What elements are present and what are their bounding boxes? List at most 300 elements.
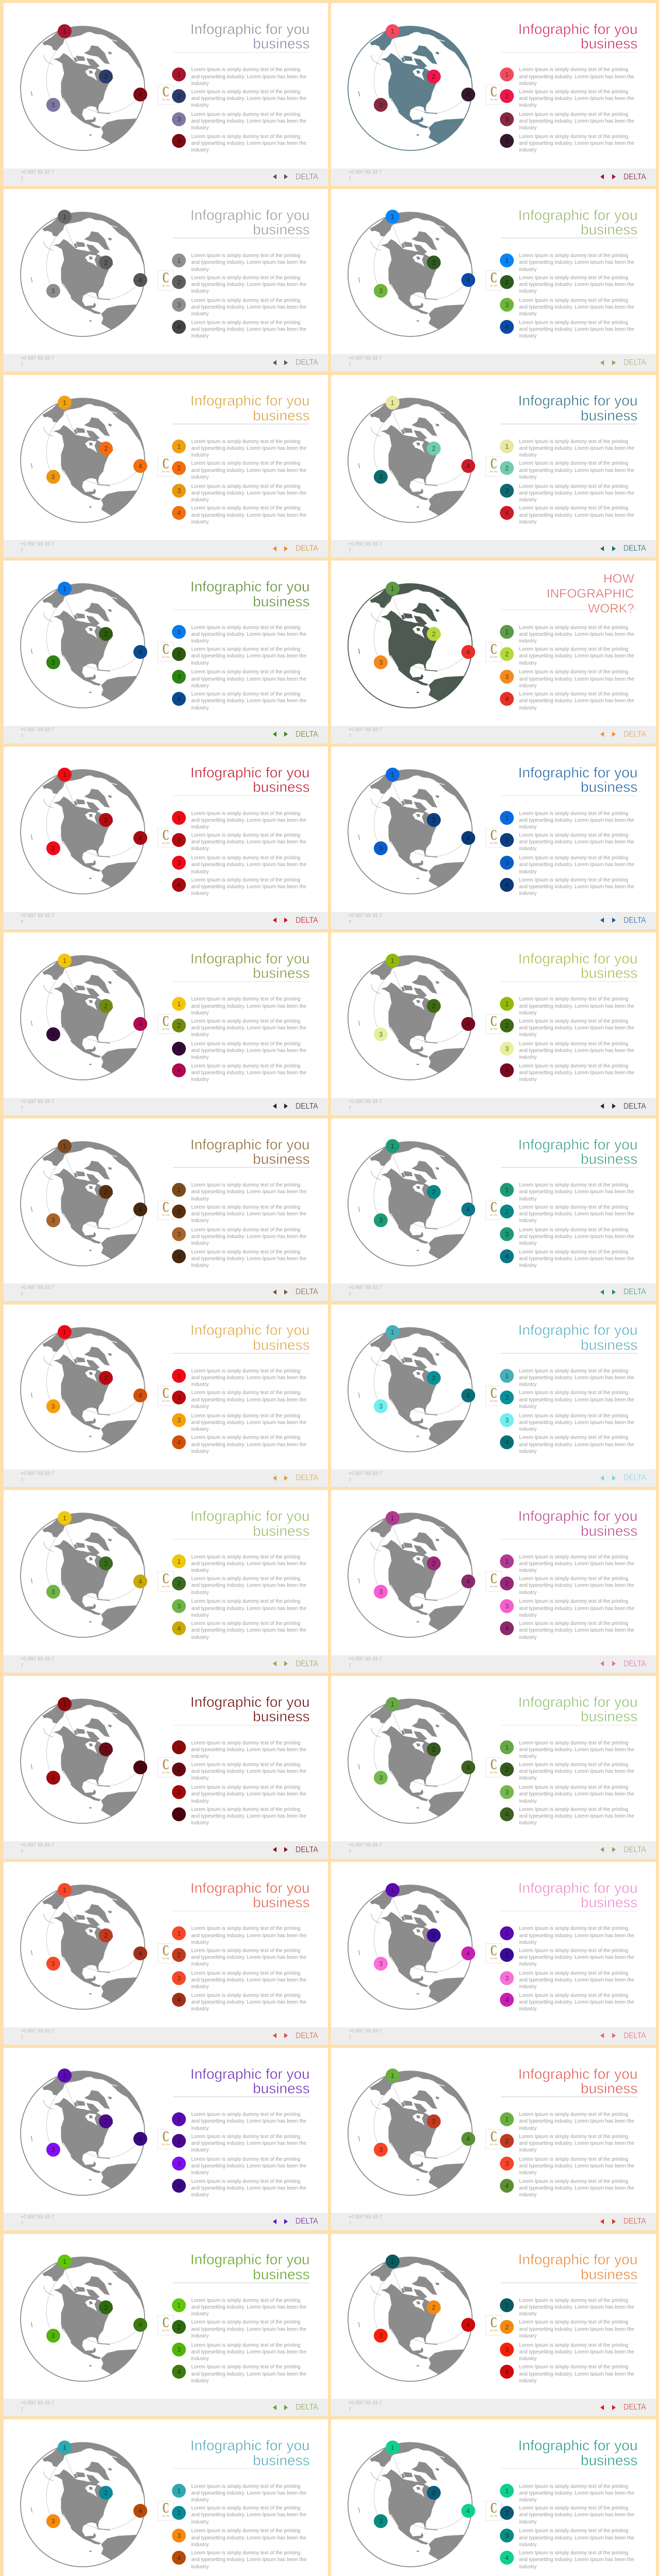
marker 3: 3 <box>379 1588 383 1596</box>
list item 3: Lorem Ipsum is simply dummy text of the printing and typesetting industry. Lorem Ipsum has been the industry <box>519 298 634 317</box>
marker 3 <box>374 2329 388 2343</box>
marker 2 <box>99 2486 113 2500</box>
marker 1 <box>58 1697 72 1711</box>
list item 2: Lorem Ipsum is simply dummy text of the printing and typesetting industry. Lorem Ipsum has been the industry <box>519 2505 634 2525</box>
list item 4: 4 <box>505 1066 509 1074</box>
title: Infographic for you <box>518 2066 637 2082</box>
marker 2: 2 <box>432 259 436 266</box>
title <box>518 393 637 423</box>
list item 4: Lorem Ipsum is simply dummy text of the printing and typesetting industry. Lorem Ipsum has been the industry <box>519 505 634 525</box>
list item 2: 2 <box>177 1951 181 1959</box>
list item 1: 1 <box>177 443 181 450</box>
list item 1: Lorem Ipsum is simply dummy text of the printing and typesetting industry. Lorem Ipsum has been the industry <box>191 1926 306 1945</box>
watermark <box>485 2129 502 2149</box>
marker 1 <box>58 582 72 596</box>
list item 4: Lorem Ipsum is simply dummy text of the printing and typesetting industry. Lorem Ipsum has been the industry <box>519 1993 634 2012</box>
list item 1: Lorem Ipsum is simply dummy text of the printing and typesetting industry. Lorem Ipsum has been the industry <box>191 2112 306 2131</box>
panel: slide 25 <box>3 2234 328 2416</box>
list item 2: 2 <box>505 464 509 472</box>
footer: 7 <box>21 548 23 554</box>
title <box>518 952 637 981</box>
title: Infographic for you <box>518 2251 637 2267</box>
marker 4: 4 <box>138 276 142 284</box>
footer <box>3 2213 328 2230</box>
footer: 7 <box>21 1106 23 1111</box>
footer: 7 <box>349 1106 351 1111</box>
footer: 7 <box>349 2221 351 2227</box>
marker 1 <box>58 396 72 410</box>
marker 3: 3 <box>379 1774 383 1782</box>
list item 1: 1 <box>505 1000 509 1008</box>
list item 3: 3 <box>177 2346 181 2353</box>
list item 1: Lorem Ipsum is simply dummy text of the printing and typesetting industry. Lorem Ipsum has been the industry <box>191 2298 306 2317</box>
title <box>190 1509 310 1538</box>
title: business <box>581 36 637 52</box>
footer <box>331 2027 656 2044</box>
list item 1: 1 <box>505 257 509 264</box>
footer <box>3 1841 328 1859</box>
list item 2: Lorem Ipsum is simply dummy text of the printing and typesetting industry. Lorem Ipsum has been the industry <box>519 2319 634 2339</box>
watermark: KK TM <box>162 1771 169 1774</box>
title <box>190 2252 310 2282</box>
list item 3: 3 <box>505 1416 509 1424</box>
marker 1 <box>386 2255 400 2268</box>
title <box>190 2438 310 2468</box>
list item 4: Lorem Ipsum is simply dummy text of the printing and typesetting industry. Lorem Ipsum has been the industry <box>191 1249 306 1268</box>
panel: slide 3 <box>3 189 328 371</box>
title: business <box>253 36 310 52</box>
marker 1: 1 <box>391 27 394 35</box>
list item 1: 1 <box>505 1557 509 1565</box>
list item 3: 3 <box>177 487 181 495</box>
footer: DELTA <box>623 1659 646 1668</box>
marker 3 <box>374 470 388 484</box>
footer <box>3 2399 328 2416</box>
panel: slide 28 <box>331 2419 656 2576</box>
marker 3 <box>374 98 388 112</box>
title <box>518 2067 637 2096</box>
marker 1 <box>386 1139 400 1153</box>
list item 1: Lorem Ipsum is simply dummy text of the printing and typesetting industry. Lorem Ipsum has been the industry <box>519 2298 634 2317</box>
list item 2: 2 <box>177 2137 181 2145</box>
marker 2: 2 <box>432 1931 436 1939</box>
watermark: KK TM <box>162 1214 169 1216</box>
list item 4: Lorem Ipsum is simply dummy text of the printing and typesetting industry. Lorem Ipsum has been the industry <box>519 1807 634 1826</box>
list item 4: 4 <box>505 2554 509 2562</box>
marker 4: 4 <box>138 2507 142 2515</box>
list item 3: 3 <box>505 673 509 681</box>
list item 1: Lorem Ipsum is simply dummy text of the printing and typesetting industry. Lorem Ipsum has been the industry <box>519 2112 634 2131</box>
marker 4: 4 <box>138 462 142 470</box>
list item 1: 1 <box>177 1557 181 1565</box>
list item 2: 2 <box>505 2137 509 2145</box>
footer: DELTA <box>623 730 646 739</box>
marker 2: 2 <box>104 1374 108 1382</box>
marker 2 <box>99 1742 113 1756</box>
globe map <box>331 2419 485 2574</box>
list item 2: Lorem Ipsum is simply dummy text of the printing and typesetting industry. Lorem Ipsum has been the industry <box>191 1390 306 1410</box>
footer: 7 <box>349 1849 351 1855</box>
list item 1: 1 <box>177 1372 181 1380</box>
footer <box>3 2027 328 2044</box>
list item 1: Lorem Ipsum is simply dummy text of the printing and typesetting industry. Lorem Ipsum has been the industry <box>519 1740 634 1759</box>
list item 1: 1 <box>505 443 509 450</box>
list item 4: 4 <box>505 509 509 517</box>
marker 3 <box>46 1585 60 1599</box>
globe map <box>331 1118 485 1273</box>
marker 3 <box>374 1957 388 1971</box>
title: Infographic for you <box>190 207 310 223</box>
marker 2: 2 <box>104 73 108 80</box>
panel: slide 21 <box>3 1862 328 2044</box>
watermark <box>485 2315 502 2335</box>
title: business <box>581 1708 637 1724</box>
watermark: KK TM <box>490 1400 497 1402</box>
marker 1 <box>386 396 400 410</box>
footer <box>331 2399 656 2416</box>
list item 1: Lorem Ipsum is simply dummy text of the printing and typesetting industry. Lorem Ipsum has been the industry <box>191 996 306 1016</box>
footer <box>331 912 656 929</box>
list item 3: Lorem Ipsum is simply dummy text of the printing and typesetting industry. Lorem Ipsum has been the industry <box>191 2528 306 2548</box>
footer: +0 897 99 33 7 <box>21 355 54 361</box>
title <box>190 207 310 238</box>
watermark: KK TM <box>490 2515 497 2517</box>
marker 3 <box>374 1585 388 1599</box>
title: business <box>253 1894 310 1910</box>
footer: DELTA <box>296 1287 318 1296</box>
marker 2 <box>427 1556 441 1570</box>
footer: +0 897 99 33 7 <box>21 913 54 919</box>
watermark <box>485 270 502 291</box>
marker 2 <box>99 627 113 641</box>
watermark <box>158 456 174 477</box>
globe map <box>331 1676 485 1831</box>
footer: DELTA <box>296 1659 318 1668</box>
list item 2: Lorem Ipsum is simply dummy text of the printing and typesetting industry. Lorem Ipsum has been the industry <box>191 2505 306 2525</box>
list item 4: Lorem Ipsum is simply dummy text of the printing and typesetting industry. Lorem Ipsum has been the industry <box>191 134 306 153</box>
watermark <box>158 2315 174 2335</box>
marker 3 <box>46 1771 60 1785</box>
footer: 7 <box>21 1663 23 1669</box>
marker 3 <box>374 2514 388 2528</box>
marker 1: 1 <box>63 2258 66 2265</box>
footer: 7 <box>21 1292 23 1297</box>
watermark: KK TM <box>490 470 497 473</box>
marker 4: 4 <box>138 2321 142 2329</box>
list item 2: Lorem Ipsum is simply dummy text of the printing and typesetting industry. Lorem Ipsum has been the industry <box>519 275 634 294</box>
title: business <box>581 779 637 795</box>
title: business <box>253 222 310 238</box>
list item 4: 4 <box>177 2554 181 2562</box>
title: Infographic for you <box>190 1508 310 1524</box>
footer: +0 897 99 33 7 <box>349 1285 382 1291</box>
list item 3: 3 <box>177 115 181 123</box>
title: Infographic for you <box>190 951 310 967</box>
marker 3: 3 <box>379 1402 383 1410</box>
list item 3: Lorem Ipsum is simply dummy text of the printing and typesetting industry. Lorem Ipsum has been the industry <box>191 669 306 689</box>
panel: slide 16 <box>331 1304 656 1487</box>
watermark <box>158 1386 174 1406</box>
list item 2: Lorem Ipsum is simply dummy text of the printing and typesetting industry. Lorem Ipsum has been the industry <box>519 1019 634 1038</box>
title: Infographic for you <box>190 2437 310 2453</box>
list item 1: 1 <box>505 1743 509 1751</box>
title <box>518 21 637 52</box>
watermark: KK TM <box>162 2329 169 2332</box>
list item 4: 4 <box>177 881 181 889</box>
footer: +0 897 99 33 7 <box>21 1285 54 1291</box>
marker 2 <box>427 2300 441 2314</box>
globe map <box>331 747 485 901</box>
footer: +0 897 99 33 7 <box>21 727 54 733</box>
watermark <box>158 2501 174 2521</box>
marker 4 <box>461 1017 475 1030</box>
marker 2: 2 <box>432 1002 436 1010</box>
footer: 7 <box>21 176 23 182</box>
title: business <box>581 1894 637 1910</box>
list item 4: Lorem Ipsum is simply dummy text of the printing and typesetting industry. Lorem Ipsum has been the industry <box>519 2364 634 2384</box>
marker 2: 2 <box>104 259 108 266</box>
list item 3: Lorem Ipsum is simply dummy text of the printing and typesetting industry. Lorem Ipsum has been the industry <box>519 669 634 689</box>
watermark: KK TM <box>490 2329 497 2332</box>
title: Infographic for you <box>190 2066 310 2082</box>
list item 2: Lorem Ipsum is simply dummy text of the printing and typesetting industry. Lorem Ipsum has been the industry <box>191 1205 306 1224</box>
marker 1: 1 <box>63 1514 66 1522</box>
marker 4: 4 <box>138 1020 142 1027</box>
marker 3 <box>374 2143 388 2157</box>
list item 3: 3 <box>177 1045 181 1053</box>
marker 4 <box>461 645 475 659</box>
list item 2: 2 <box>177 1580 181 1587</box>
globe map <box>20 583 145 708</box>
footer: DELTA <box>623 1287 646 1296</box>
panel: slide 10 <box>331 747 656 929</box>
list item 1: 1 <box>177 71 181 78</box>
title: Infographic for you <box>518 1694 637 1710</box>
marker 3 <box>46 2329 60 2343</box>
watermark <box>158 1757 174 1777</box>
list item 3: 3 <box>505 1602 509 1610</box>
marker 1 <box>386 768 400 782</box>
marker 1: 1 <box>391 585 394 592</box>
title: business <box>581 408 637 423</box>
list item 1: 1 <box>177 1929 181 1937</box>
list item 3: Lorem Ipsum is simply dummy text of the printing and typesetting industry. Lorem Ipsum has been the industry <box>519 112 634 131</box>
marker 2: 2 <box>104 445 108 452</box>
list item 2: Lorem Ipsum is simply dummy text of the printing and typesetting industry. Lorem Ipsum has been the industry <box>519 1576 634 1596</box>
title <box>190 21 310 52</box>
title: INFOGRAPHIC <box>547 587 634 601</box>
marker 3: 3 <box>379 473 383 481</box>
list item 4: 4 <box>177 2368 181 2376</box>
list item 3: 3 <box>505 1045 509 1053</box>
list item 2: Lorem Ipsum is simply dummy text of the printing and typesetting industry. Lorem Ipsum has been the industry <box>519 833 634 852</box>
watermark: KK TM <box>162 1028 169 1030</box>
watermark: KK TM <box>162 284 169 287</box>
footer: DELTA <box>623 1473 646 1482</box>
list item 2: 2 <box>177 1208 181 1215</box>
watermark <box>158 1943 174 1963</box>
marker 4 <box>133 273 147 287</box>
marker 3: 3 <box>379 1030 383 1038</box>
list item 3: Lorem Ipsum is simply dummy text of the printing and typesetting industry. Lorem Ipsum has been the industry <box>191 112 306 131</box>
watermark: KK TM <box>490 1957 497 1960</box>
title: Infographic for you <box>190 1880 310 1896</box>
list item 3: 3 <box>505 2532 509 2539</box>
list item 1: 1 <box>505 628 509 636</box>
list item 3: Lorem Ipsum is simply dummy text of the printing and typesetting industry. Lorem Ipsum has been the industry <box>519 1599 634 1618</box>
marker 2 <box>99 1556 113 1570</box>
globe map <box>331 561 485 715</box>
list item 2: Lorem Ipsum is simply dummy text of the printing and typesetting industry. Lorem Ipsum has been the industry <box>519 1390 634 1410</box>
footer <box>3 1469 328 1487</box>
marker 2: 2 <box>432 630 436 638</box>
list item 2: Lorem Ipsum is simply dummy text of the printing and typesetting industry. Lorem Ipsum has been the industry <box>519 1762 634 1781</box>
marker 2 <box>427 1928 441 1942</box>
title: business <box>581 1337 637 1353</box>
list item 3: 3 <box>177 1230 181 1238</box>
footer <box>3 1097 328 1115</box>
list item 2: 2 <box>177 278 181 286</box>
watermark <box>158 1014 174 1034</box>
marker 4 <box>461 2132 475 2146</box>
footer: 7 <box>21 1478 23 1483</box>
marker 3: 3 <box>51 1960 55 1968</box>
title: business <box>253 965 310 981</box>
watermark <box>158 84 174 105</box>
title: business <box>581 1151 637 1167</box>
marker 3: 3 <box>379 1216 383 1224</box>
marker 2 <box>99 813 113 827</box>
marker 4 <box>461 1760 475 1774</box>
watermark: KK TM <box>490 1771 497 1774</box>
list item 3: Lorem Ipsum is simply dummy text of the printing and typesetting industry. Lorem Ipsum has been the industry <box>519 1041 634 1060</box>
title: business <box>581 2080 637 2096</box>
list item 1: 1 <box>177 2487 181 2495</box>
list item 3: 3 <box>177 673 181 681</box>
list item 4: Lorem Ipsum is simply dummy text of the printing and typesetting industry. Lorem Ipsum has been the industry <box>519 320 634 339</box>
marker 4 <box>461 1946 475 1960</box>
marker 3: 3 <box>51 1030 55 1038</box>
marker 1: 1 <box>63 956 66 964</box>
marker 1: 1 <box>391 2258 394 2265</box>
marker 4: 4 <box>466 1578 470 1585</box>
panel: slide 14 <box>331 1118 656 1301</box>
footer: 7 <box>349 2407 351 2413</box>
watermark: KK TM <box>162 1400 169 1402</box>
marker 4: 4 <box>138 91 142 98</box>
globe map <box>3 1118 158 1273</box>
list item 3: 3 <box>505 2346 509 2353</box>
footer: DELTA <box>623 916 646 925</box>
footer <box>331 1469 656 1487</box>
list item 4: Lorem Ipsum is simply dummy text of the printing and typesetting industry. Lorem Ipsum has been the industry <box>519 2550 634 2570</box>
watermark <box>158 2129 174 2149</box>
marker 2: 2 <box>104 2303 108 2311</box>
marker 1 <box>58 210 72 224</box>
footer: +0 897 99 33 7 <box>349 727 382 733</box>
list item 4: 4 <box>177 1066 181 1074</box>
marker 4: 4 <box>138 1392 142 1399</box>
marker 2: 2 <box>104 1931 108 1939</box>
list item 4: 4 <box>177 2182 181 2190</box>
footer <box>3 912 328 929</box>
list item 1: Lorem Ipsum is simply dummy text of the printing and typesetting industry. Lorem Ipsum has been the industry <box>519 625 634 644</box>
footer: 7 <box>21 362 23 368</box>
list item 3: Lorem Ipsum is simply dummy text of the printing and typesetting industry. Lorem Ipsum has been the industry <box>519 855 634 875</box>
footer: DELTA <box>623 1845 646 1854</box>
globe map <box>331 1304 485 1459</box>
list item 2: Lorem Ipsum is simply dummy text of the printing and typesetting industry. Lorem Ipsum has been the industry <box>519 1205 634 1224</box>
list item 4: 4 <box>505 323 509 331</box>
list item 3: Lorem Ipsum is simply dummy text of the printing and typesetting industry. Lorem Ipsum has been the industry <box>519 1413 634 1432</box>
footer: DELTA <box>296 916 318 925</box>
list item 4: 4 <box>505 1438 509 1446</box>
footer: 7 <box>21 2221 23 2227</box>
footer: +0 897 99 33 7 <box>21 1842 54 1848</box>
footer: +0 897 99 33 7 <box>349 170 382 175</box>
footer: 7 <box>349 548 351 554</box>
list item 4: Lorem Ipsum is simply dummy text of the printing and typesetting industry. Lorem Ipsum has been the industry <box>519 1435 634 1454</box>
marker 3 <box>46 2514 60 2528</box>
list item 2: 2 <box>505 2509 509 2517</box>
marker 2 <box>427 1742 441 1756</box>
footer: +0 897 99 33 7 <box>349 1471 382 1477</box>
panel: slide 2 <box>331 3 656 185</box>
marker 3 <box>374 841 388 855</box>
watermark <box>485 1943 502 1963</box>
watermark: KK TM <box>162 2515 169 2517</box>
marker 1 <box>386 1325 400 1339</box>
footer: +0 897 99 33 7 <box>349 1099 382 1105</box>
footer: DELTA <box>296 544 318 553</box>
list item 2: Lorem Ipsum is simply dummy text of the printing and typesetting industry. Lorem Ipsum has been the industry <box>519 647 634 666</box>
watermark <box>485 456 502 477</box>
footer: +0 897 99 33 7 <box>349 2400 382 2406</box>
list item 4: Lorem Ipsum is simply dummy text of the printing and typesetting industry. Lorem Ipsum has been the industry <box>191 691 306 711</box>
marker 2 <box>427 256 441 269</box>
marker 3: 3 <box>379 101 383 109</box>
list item 2: Lorem Ipsum is simply dummy text of the printing and typesetting industry. Lorem Ipsum has been the industry <box>519 89 634 108</box>
footer: DELTA <box>296 1845 318 1854</box>
footer: DELTA <box>296 2403 318 2412</box>
title: business <box>253 1523 310 1539</box>
footer: DELTA <box>623 2031 646 2040</box>
marker 1 <box>386 2069 400 2082</box>
marker 1 <box>58 1139 72 1153</box>
title: business <box>253 1337 310 1353</box>
list item 2: 2 <box>177 2509 181 2517</box>
globe map <box>348 398 473 523</box>
footer: 7 <box>21 734 23 739</box>
list item 1: Lorem Ipsum is simply dummy text of the printing and typesetting industry. Lorem Ipsum has been the industry <box>519 1182 634 1202</box>
list item 3: Lorem Ipsum is simply dummy text of the printing and typesetting industry. Lorem Ipsum has been the industry <box>191 1413 306 1432</box>
watermark <box>158 1200 174 1220</box>
marker 1 <box>58 1325 72 1339</box>
marker 3 <box>374 655 388 669</box>
list item 3: Lorem Ipsum is simply dummy text of the printing and typesetting industry. Lorem Ipsum has been the industry <box>191 484 306 503</box>
watermark: KK TM <box>490 284 497 287</box>
globe map <box>3 2419 158 2574</box>
title: business <box>253 1708 310 1724</box>
marker 1: 1 <box>391 2444 394 2451</box>
marker 4: 4 <box>138 648 142 656</box>
globe map <box>331 933 485 1087</box>
list item 3: Lorem Ipsum is simply dummy text of the printing and typesetting industry. Lorem Ipsum has been the industry <box>519 1971 634 1990</box>
marker 1 <box>386 582 400 596</box>
title: Infographic for you <box>190 2251 310 2267</box>
marker 2 <box>99 1928 113 1942</box>
title <box>190 1323 310 1352</box>
